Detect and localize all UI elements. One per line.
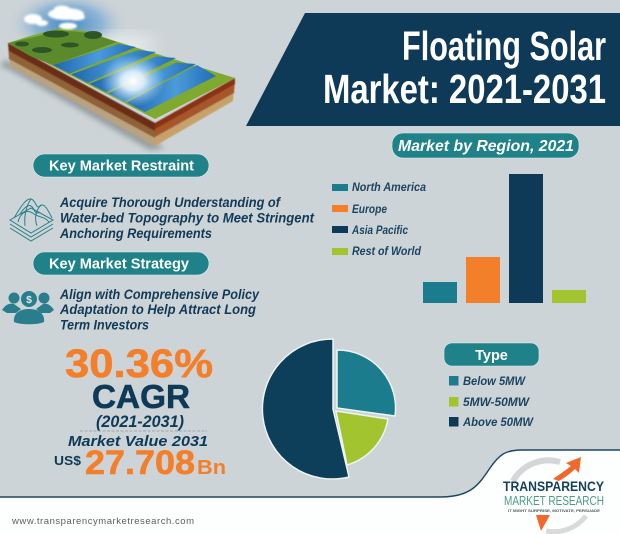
- heading: market by region: [392, 133, 579, 158]
- title banner: [246, 13, 620, 126]
- icon: investors group: [2, 291, 54, 324]
- heading: key market strategy: Key Market Strategy: [49, 256, 189, 272]
- stat: CAGR: 30.36%: [65, 342, 213, 386]
- illustration: solar farm land block: [0, 0, 235, 150]
- heading: type: Type: [475, 348, 508, 364]
- legend: type: 5MW-50MW: [463, 397, 530, 409]
- legend: region: Asia Pacific: [351, 225, 409, 237]
- text: restraint description: Acquire Thorough Understanding of: [59, 195, 281, 210]
- stat: market value 2031: US$: [54, 453, 82, 468]
- text: strategy description: Adaptation to Help Attract Long: [59, 302, 257, 317]
- legend: region: Rest of World: [352, 246, 422, 258]
- bar chart: market by region: [423, 174, 586, 303]
- heading: market by region: Market by Region, 2021: [398, 138, 574, 155]
- heading: key market strategy: [33, 252, 209, 275]
- solar panels: [53, 44, 216, 112]
- heading: key market restraint: Key Market Restraint: [49, 158, 194, 174]
- land surface: [8, 28, 235, 119]
- legend: type: Below 5MW: [463, 376, 526, 388]
- stat: CAGR: (2021-2031): [96, 413, 184, 431]
- text: restraint description: [59, 195, 314, 241]
- footer white area with curved edge: [0, 450, 620, 534]
- stat: market value 2031: [54, 433, 226, 482]
- legend: type: [449, 376, 534, 429]
- stat: CAGR: CAGR: [92, 378, 190, 415]
- soil: left side: [8, 43, 235, 146]
- stat: market value 2031: 27.708: [85, 444, 195, 482]
- icon: investors group: $: [26, 294, 32, 306]
- legend: region: North America: [352, 182, 427, 194]
- logo: Transparency Market Research: TRANSPARENCY: [503, 478, 605, 494]
- soil: right side: [155, 78, 235, 146]
- text: strategy description: Term Investors: [60, 318, 149, 332]
- pie chart: type: [262, 339, 396, 479]
- text: strategy description: Align with Comprehensive Policy: [59, 287, 260, 302]
- stat: CAGR: [65, 342, 213, 431]
- legend: type: Above 50MW: [462, 417, 534, 429]
- logo: Transparency Market Research: IT MIGHT SURPRISE, MOTIVATE, PERSUADE: [508, 508, 600, 513]
- legend: region: Europe: [352, 204, 388, 216]
- clouds: [24, 6, 85, 30]
- icon: layered topography: [10, 199, 53, 241]
- stat: market value 2031: Market Value 2031: [68, 433, 208, 450]
- stat: market value 2031: Bn: [197, 457, 226, 479]
- heading: type: [444, 343, 539, 366]
- text: restraint description: Water-bed Topography to Meet Stringent: [60, 210, 314, 226]
- text: strategy description: [59, 287, 260, 332]
- heading: key market restraint: [33, 154, 209, 177]
- text: restraint description: Anchoring Requirements: [59, 226, 212, 241]
- logo: Transparency Market Research: [503, 457, 605, 532]
- legend: region: [332, 182, 427, 258]
- footer website: www.transparencymarketresearch.com: [11, 516, 194, 527]
